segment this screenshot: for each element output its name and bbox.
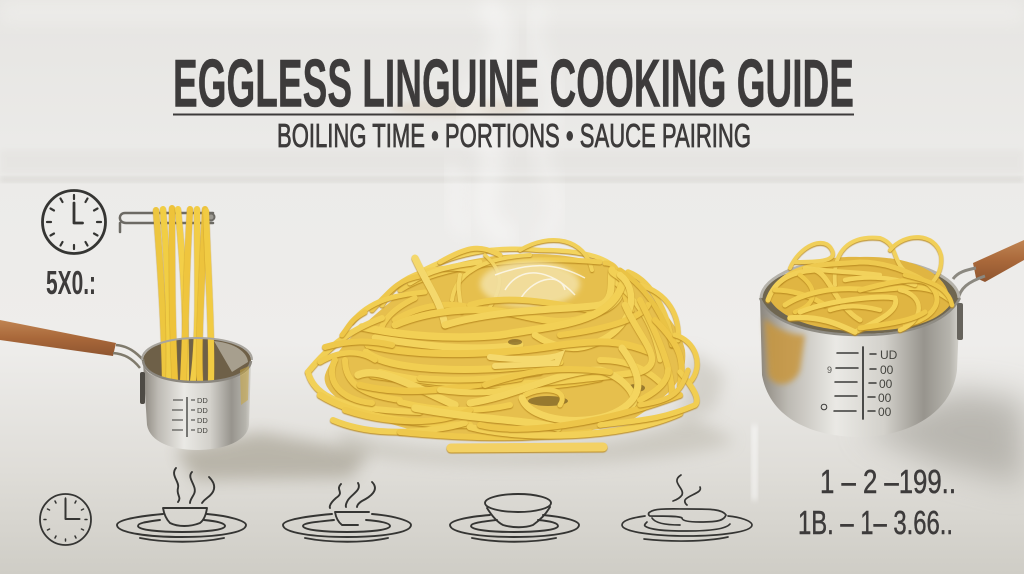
portion figure line 2: 1B. – 1– 3.66.. xyxy=(798,504,953,541)
noodles in pot xyxy=(770,257,950,331)
measuring marks: 00 xyxy=(880,363,894,377)
noodle reflection xyxy=(764,318,805,384)
garbled portion figures xyxy=(798,463,956,541)
middle strands xyxy=(308,270,697,412)
rim xyxy=(760,298,960,335)
measuring marks xyxy=(172,396,208,437)
steam rising xyxy=(450,10,556,235)
measuring marks: 00 xyxy=(878,391,892,405)
measuring marks: DD xyxy=(197,406,208,415)
nest base xyxy=(325,254,685,438)
icon: plate with cup and tall steam xyxy=(117,468,246,542)
central linguine nest xyxy=(308,240,697,448)
measuring marks: UD xyxy=(880,348,898,362)
measuring marks: DD xyxy=(197,416,208,425)
wire handle xyxy=(953,268,985,300)
front strands xyxy=(320,348,697,448)
wire handle xyxy=(113,345,144,368)
icon: small clock xyxy=(40,494,91,545)
measuring marks: 00 xyxy=(878,405,892,419)
measuring marks xyxy=(821,347,898,419)
measuring marks: 9 xyxy=(827,365,832,375)
measuring marks: DD xyxy=(197,426,208,435)
portion figure line 1: 1 – 2 –199.. xyxy=(820,463,956,500)
tongs xyxy=(120,213,214,232)
icon: plate with bowl xyxy=(450,494,579,542)
rivet bracket xyxy=(957,303,963,340)
rivet bracket xyxy=(140,372,145,404)
pot body xyxy=(143,362,251,450)
hanging linguine strands xyxy=(156,208,211,381)
garbled time label: 5X0.: xyxy=(46,264,96,301)
pot body xyxy=(760,298,960,437)
icon: plate with small cup and steam xyxy=(283,482,411,542)
icon: plate with covered dish and steam xyxy=(622,475,752,541)
right measuring pot filled with linguine xyxy=(760,237,1024,437)
wooden handle xyxy=(0,320,116,356)
icon: large clock xyxy=(42,190,106,254)
back strands xyxy=(352,240,678,360)
pot inside xyxy=(143,338,251,382)
measuring marks: 00 xyxy=(879,377,893,391)
pot inside xyxy=(760,262,960,334)
wooden handle xyxy=(973,240,1024,282)
left measuring pot with hanging linguine xyxy=(0,208,252,450)
steamy pale centre of nest xyxy=(480,261,580,307)
measuring marks: DD xyxy=(197,396,208,405)
dark gaps between strands xyxy=(508,339,645,406)
shadows on the table xyxy=(175,350,1024,500)
subtitle: BOILING TIME • PORTIONS • SAUCE PAIRING xyxy=(277,117,751,154)
title underline xyxy=(173,114,854,116)
